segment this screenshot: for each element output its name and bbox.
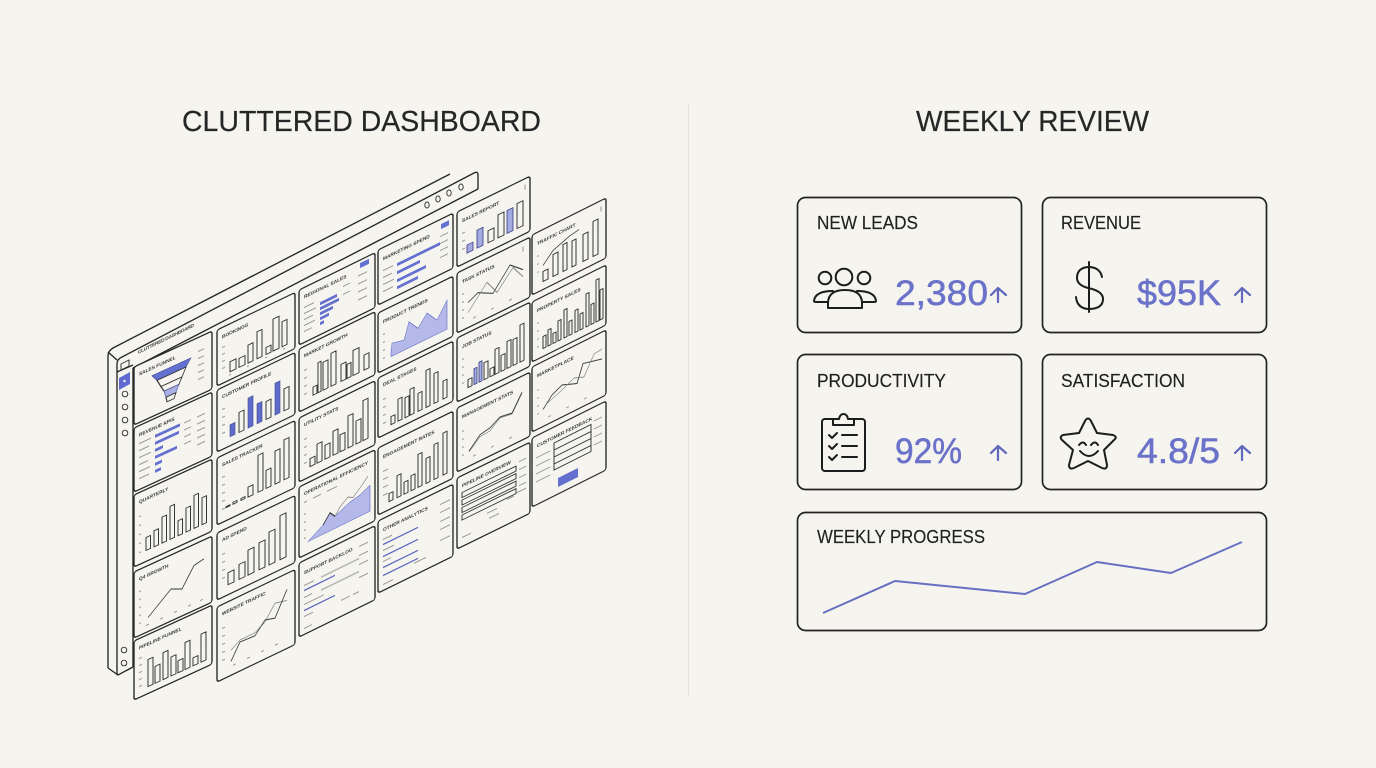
panel: bar chart 3 <box>217 293 295 386</box>
icon: up arrow <box>991 446 1006 460</box>
panel: sales funnel: SALES FUNNEL <box>139 355 176 378</box>
panel: horizontal bars 2: REGIONAL SALES <box>304 274 347 300</box>
panel: bar chart 8: DEAL STAGES <box>383 366 417 388</box>
panel: bar chart 10: SALES REPORT <box>462 200 500 224</box>
card: weekly progress <box>798 512 1266 630</box>
panel: bar chart 6 <box>299 312 375 412</box>
panel: bar chart 7: UTILITY STATS <box>304 406 339 428</box>
panel: area chart 2: PRODUCT TRENDS <box>383 298 428 325</box>
panel: bar chart 10 <box>457 176 530 267</box>
panel: horizontal bars 1: REVENUE KPIS <box>139 416 175 439</box>
panel: horizontal bars 3 <box>378 213 453 305</box>
panel: bar chart 5 <box>217 496 295 600</box>
panel: bar chart 1: QUARTERLY <box>139 486 169 506</box>
panel: input form 1: PIPELINE OVERVIEW <box>462 460 511 489</box>
panel: blue bar chart <box>217 353 295 452</box>
panel: bar chart 4 <box>217 421 295 525</box>
panel: bar chart 5: AD SPEND <box>222 526 247 543</box>
panel: dense bar chart: PROPERTY SALES <box>537 287 581 314</box>
panel: line chart 5: MARKETPLACE <box>537 355 574 379</box>
card: weekly progress: WEEKLY PROGRESS <box>817 527 985 547</box>
icon: people <box>814 269 876 308</box>
window frame: CLUTTERED DASHBOARD <box>138 323 194 356</box>
card: revenue: $95K <box>1137 274 1221 313</box>
panel: horizontal bars 3: MARKETING SPEND <box>383 234 430 262</box>
panel: bar chart 7 <box>299 381 375 482</box>
panel: bar chart 9 <box>378 411 453 515</box>
panel: dense bar chart <box>532 265 606 362</box>
icon: clipboard <box>822 414 865 471</box>
panel: bar and line chart <box>532 198 606 295</box>
icon: dollar sign <box>1076 262 1103 312</box>
panel: bar chart 2 <box>134 605 212 700</box>
panel: bar and line chart: TRAFFIC CHART <box>537 222 576 247</box>
panel: bar chart 2: PIPELINE FUNNEL <box>139 626 182 652</box>
panel: thin bars 1: SUPPORT BACKLOG <box>304 547 353 576</box>
panel: line chart 2 <box>217 570 295 682</box>
card: satisfaction: SATISFACTION <box>1061 371 1185 391</box>
card: productivity: 92% <box>895 432 962 471</box>
panel: bar chart 9: ENGAGEMENT RATES <box>383 429 435 460</box>
panel: line chart 3 <box>457 237 530 333</box>
panel: line chart 1: Q4 GROWTH <box>139 563 169 583</box>
panel: horizontal bars 1 <box>134 392 212 492</box>
line chart: weekly progress <box>823 542 1242 613</box>
panel: thin bars 1 <box>299 526 375 637</box>
panel: blue bar chart: CUSTOMER PROFILE <box>222 371 272 400</box>
icon: up arrow <box>1235 446 1250 460</box>
panel: bar chart 11: JOB STATUS <box>462 330 492 350</box>
panel: line chart 5 <box>532 330 606 432</box>
illustration: isometric cluttered dashboard <box>108 172 606 700</box>
panel: line chart 1 <box>134 536 212 638</box>
panel: line chart 2: WEBSITE TRAFFIC <box>222 591 266 617</box>
panel: bar chart 4: SALES TRACKER <box>222 443 263 468</box>
panel: line chart 4: MANAGEMENT STATS <box>462 389 514 420</box>
panel: bar chart 11 <box>457 302 530 402</box>
icon: up arrow <box>1235 288 1250 302</box>
icon: up arrow <box>991 288 1006 302</box>
title: weekly review: WEEKLY REVIEW <box>916 106 1150 138</box>
card: revenue <box>1042 198 1266 332</box>
card: satisfaction: 4.8/5 <box>1137 432 1220 471</box>
panel: bar chart 1 <box>134 459 212 567</box>
panel: area chart 1 <box>299 450 375 558</box>
panel: line chart 4 <box>457 372 530 472</box>
panel: bar chart 8 <box>378 341 453 438</box>
card: new leads: 2,380 <box>895 274 988 313</box>
card: satisfaction <box>1042 354 1266 490</box>
panel: thin bars 2: OTHER ANALYTICS <box>383 506 428 533</box>
card: revenue: REVENUE <box>1061 213 1141 233</box>
panel: horizontal bars 2 <box>299 253 375 345</box>
panel: input form 2 <box>532 401 606 507</box>
panel: input form 2: CUSTOMER FEEDBACK <box>537 416 593 449</box>
card: productivity <box>798 354 1022 490</box>
card: new leads <box>798 198 1022 332</box>
panel: line chart 3: TASK STATUS <box>462 264 495 285</box>
panel: area chart 2 <box>378 276 453 373</box>
panel: area chart 1: OPERATIONAL EFFICIENCY <box>304 460 369 497</box>
window frame <box>108 172 478 675</box>
card: new leads: NEW LEADS <box>817 213 918 233</box>
card: productivity: PRODUCTIVITY <box>817 371 946 391</box>
panel: bar chart 6: MARKET GROWTH <box>304 332 348 359</box>
panel: bar chart 3: BOOKINGS <box>222 322 249 340</box>
icon: smiling star <box>1061 418 1116 469</box>
title: cluttered dashboard: CLUTTERED DASHBOARD <box>182 106 541 138</box>
panel: input form 1 <box>457 442 530 549</box>
panel: sales funnel <box>134 331 212 425</box>
panel: thin bars 2 <box>378 484 453 593</box>
